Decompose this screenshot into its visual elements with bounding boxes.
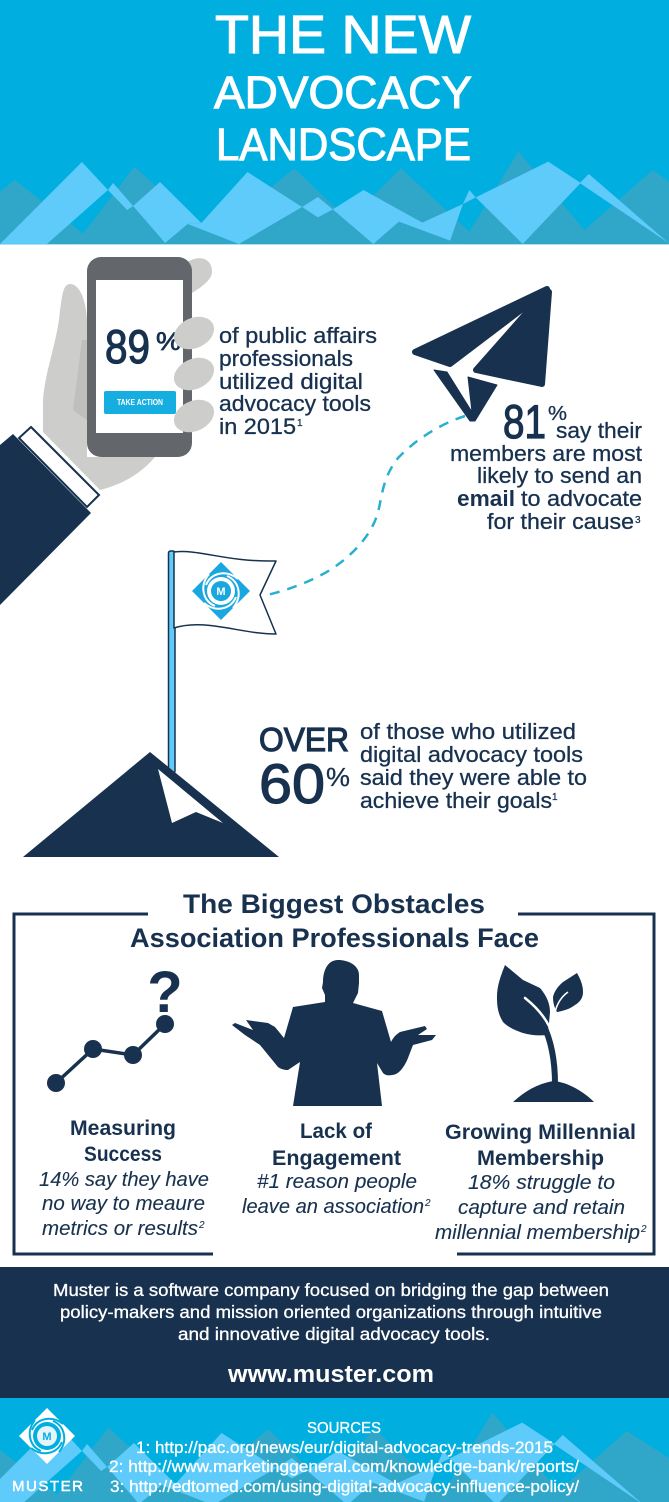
column: measuring success: 2 — [198, 1220, 205, 1231]
header banner — [0, 0, 669, 245]
panel frame — [14, 914, 654, 1254]
panel: about muster: www.muster.com — [227, 1361, 434, 1388]
title — [214, 5, 472, 170]
column: growing millennial membership: capture and retain — [458, 1197, 625, 1219]
stat: 81 percent text: email — [457, 486, 515, 511]
icon: sprout — [497, 965, 594, 1102]
stat: over 60 percent: 60 — [259, 752, 325, 815]
sources list: 1: http://pac.org/news/eur/digital-advocacy-trends-2015 — [136, 1438, 553, 1457]
panel: about muster: and innovative digital advocacy tools. — [178, 1324, 490, 1344]
icon: hand holding phone — [0, 257, 219, 605]
sources list: 2: http://www.marketinggeneral.com/knowledge-bank/reports/ — [109, 1457, 579, 1476]
stat: over 60 percent: 1 — [552, 792, 558, 803]
stat: over 60 percent: OVER — [259, 721, 349, 758]
stat: over 60 percent: said they were able to — [360, 765, 587, 790]
stat: 81 percent text: likely to send an — [477, 463, 642, 488]
sleeve — [0, 434, 91, 605]
phone: TAKE ACTION — [117, 398, 163, 407]
muster logo: M — [42, 1431, 52, 1443]
stat: 89 percent text: professionals — [219, 346, 353, 371]
stat: 89 percent text — [219, 323, 377, 439]
icon: line chart with question mark — [47, 960, 183, 1092]
stat: 81 percent text — [450, 395, 642, 534]
muster logo: MUSTER — [12, 1478, 83, 1495]
stat: over 60 percent: digital advocacy tools — [360, 742, 583, 767]
shirt cuff — [19, 427, 99, 507]
column: growing millennial membership: 18% struggle to — [468, 1172, 615, 1194]
column: lack of engagement: leave an association — [242, 1196, 424, 1218]
panel heading — [130, 889, 539, 953]
icon: paper plane — [415, 289, 549, 421]
column: growing millennial membership: 2 — [640, 1224, 647, 1235]
title: THE NEW — [215, 5, 471, 65]
mountain — [23, 752, 279, 857]
stat: 81 percent text: 81 — [503, 395, 546, 448]
phone — [87, 257, 192, 457]
back finger — [188, 258, 212, 293]
icon: flag on mountain — [23, 551, 279, 857]
flag cloth — [174, 552, 276, 634]
column: measuring success: Measuring — [70, 1117, 176, 1140]
hand palm — [43, 284, 155, 490]
sources list: 3: http://edtomed.com/using-digital-advocacy-influence-policy/ — [110, 1477, 579, 1496]
stat: 81 percent text: for their cause — [487, 509, 634, 534]
stat: over 60 percent: % — [326, 762, 350, 792]
stat: over 60 percent — [259, 719, 587, 815]
panel: about muster: policy-makers and mission oriented organizations through intuitive — [60, 1302, 602, 1322]
stat: 81 percent text: % — [548, 403, 567, 425]
title: ADVOCACY — [214, 67, 472, 118]
column: growing millennial membership: millennial membership — [435, 1222, 640, 1244]
phone: % — [156, 328, 181, 356]
column: growing millennial membership: Membership — [477, 1147, 604, 1170]
stat: 81 percent text: members are most — [450, 441, 642, 466]
mountain snow — [158, 769, 223, 823]
stat: 89 percent text: 1 — [297, 418, 303, 429]
stat: 89 percent text: advocacy tools — [219, 391, 371, 416]
stat: 81 percent text: say their — [556, 418, 642, 443]
stat: over 60 percent: achieve their goals — [360, 788, 552, 813]
column: lack of engagement: Lack of — [300, 1120, 373, 1143]
column: lack of engagement: #1 reason people — [257, 1171, 417, 1193]
column: growing millennial membership: Growing Millennial — [445, 1121, 636, 1144]
column: measuring success — [39, 1117, 209, 1240]
stat: 81 percent text: 3 — [635, 515, 641, 526]
stat: 89 percent text: utilized digital — [219, 369, 363, 394]
column: measuring success: no way to meaure — [42, 1193, 205, 1215]
panel: footer sources — [0, 1398, 669, 1502]
dashed flight path — [267, 416, 465, 595]
title: LANDSCAPE — [216, 119, 471, 170]
logo on flag: M — [216, 586, 226, 598]
stat: 81 percent text: to advocate — [521, 486, 642, 511]
stat: over 60 percent: of those who utilized — [360, 719, 576, 744]
column: measuring success: Success — [84, 1143, 162, 1166]
sources list: SOURCES — [307, 1420, 381, 1437]
panel: biggest obstacles — [14, 889, 654, 1254]
icon: shrugging man — [232, 960, 436, 1106]
column: lack of engagement — [242, 1120, 431, 1218]
icon: line chart with question mark: ? — [147, 960, 183, 1025]
phone: 89 — [105, 320, 150, 373]
column: lack of engagement: 2 — [424, 1198, 431, 1209]
fingers — [169, 311, 219, 438]
stat: 89 percent text: in 2015 — [219, 414, 296, 439]
panel: about muster: Muster is a software company focused on bridging the gap between — [53, 1280, 609, 1300]
sources list — [109, 1420, 579, 1496]
panel heading: Association Professionals Face — [130, 923, 539, 953]
logo on flag — [192, 562, 250, 620]
column: measuring success: 14% say they have — [39, 1169, 209, 1191]
column: lack of engagement: Engagement — [272, 1147, 401, 1170]
panel heading: The Biggest Obstacles — [183, 889, 485, 919]
header mountains — [0, 152, 669, 244]
muster logo — [12, 1408, 83, 1495]
panel: about muster — [0, 1267, 669, 1398]
column: measuring success: metrics or results — [42, 1218, 198, 1240]
flag pole — [168, 551, 175, 773]
footer mountains — [0, 1413, 669, 1502]
column: growing millennial membership — [435, 1121, 647, 1244]
stat: 89 percent text: of public affairs — [219, 323, 377, 348]
